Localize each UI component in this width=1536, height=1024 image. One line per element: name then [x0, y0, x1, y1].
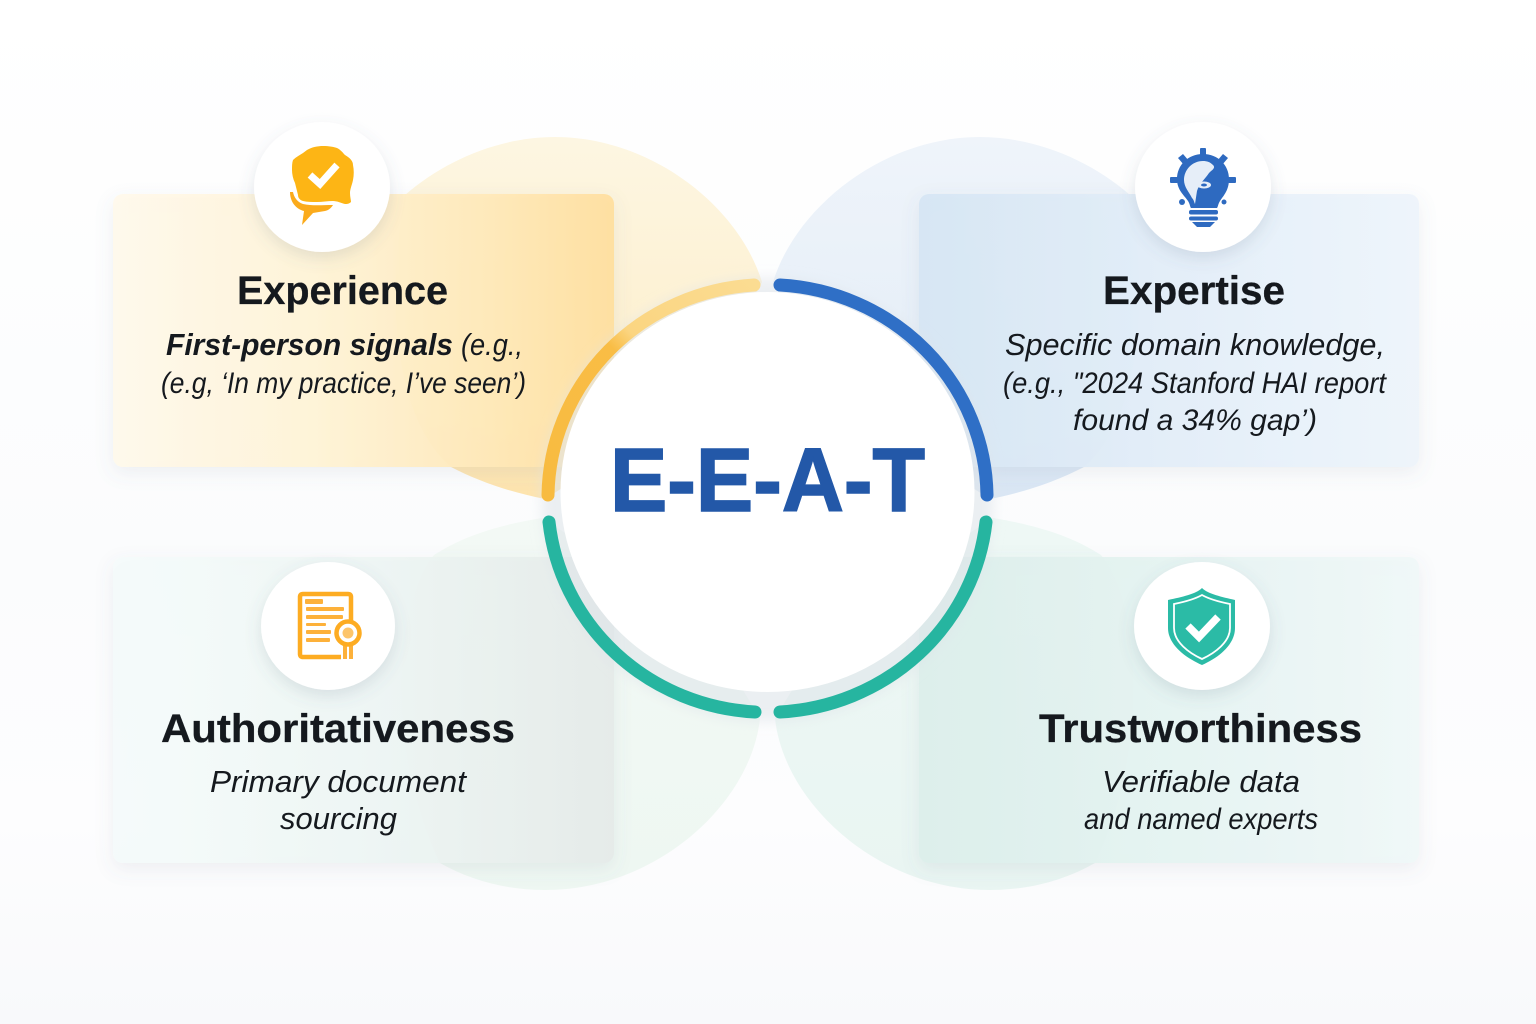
petal: expertise [773, 137, 1139, 499]
arc: trustworthiness [780, 522, 986, 712]
center circle [560, 292, 974, 692]
body: trustworthiness description: and named experts [1084, 803, 1318, 836]
body: trustworthiness description [1084, 764, 1318, 836]
heading: trustworthiness: Trustworthiness [1039, 707, 1362, 751]
petal: trustworthiness [775, 518, 1133, 890]
body: authoritativeness description: sourcing [280, 801, 397, 836]
icon badge: trustworthiness [1134, 562, 1270, 690]
arc: experience [548, 285, 754, 495]
heading: authoritativeness: Authoritativeness [161, 707, 515, 751]
icon: light bulb with globe [1170, 148, 1236, 227]
icon badge: experience [254, 122, 390, 252]
icon: speech bubbles with check [290, 146, 354, 225]
title: E-E-A-T: E-E-A-T [610, 431, 925, 531]
text block: authoritativeness [161, 707, 515, 836]
body: expertise description [1003, 327, 1388, 437]
text block: experience [161, 269, 526, 400]
icon: certificate document [300, 594, 360, 659]
body: expertise description: Specific domain knowledge, [1005, 327, 1385, 362]
body: authoritativeness description [210, 764, 467, 836]
panel: trustworthiness card [919, 557, 1419, 863]
heading: experience: Experience [237, 269, 448, 313]
petal: authoritativeness [402, 518, 760, 890]
icon badge: expertise [1135, 122, 1271, 252]
body: expertise description: found a 34% gap’) [1073, 404, 1317, 437]
panel: authoritativeness card [113, 557, 614, 863]
petal: experience [396, 137, 762, 499]
body: experience first line: (e.g., [461, 327, 523, 362]
panel: expertise card [919, 194, 1419, 467]
text block: expertise [1003, 269, 1388, 437]
icon: shield with check [1168, 588, 1235, 665]
panel: experience card [113, 194, 614, 467]
arc: authoritativeness [549, 522, 755, 712]
body: expertise description: (e.g., "2024 Stanford HAI report [1003, 367, 1388, 400]
body: trustworthiness description: Verifiable data [1102, 764, 1300, 799]
body: experience first line: First-person signals [166, 327, 453, 362]
heading: expertise: Expertise [1103, 269, 1285, 313]
body: experience second line: (e.g, ‘In my practice, I’ve seen’) [161, 367, 526, 400]
text block: trustworthiness [1039, 707, 1362, 836]
icon badge: authoritativeness [261, 562, 395, 690]
body: authoritativeness description: Primary document [210, 764, 467, 799]
arc: expertise [780, 285, 987, 495]
central ring halo [542, 278, 994, 722]
